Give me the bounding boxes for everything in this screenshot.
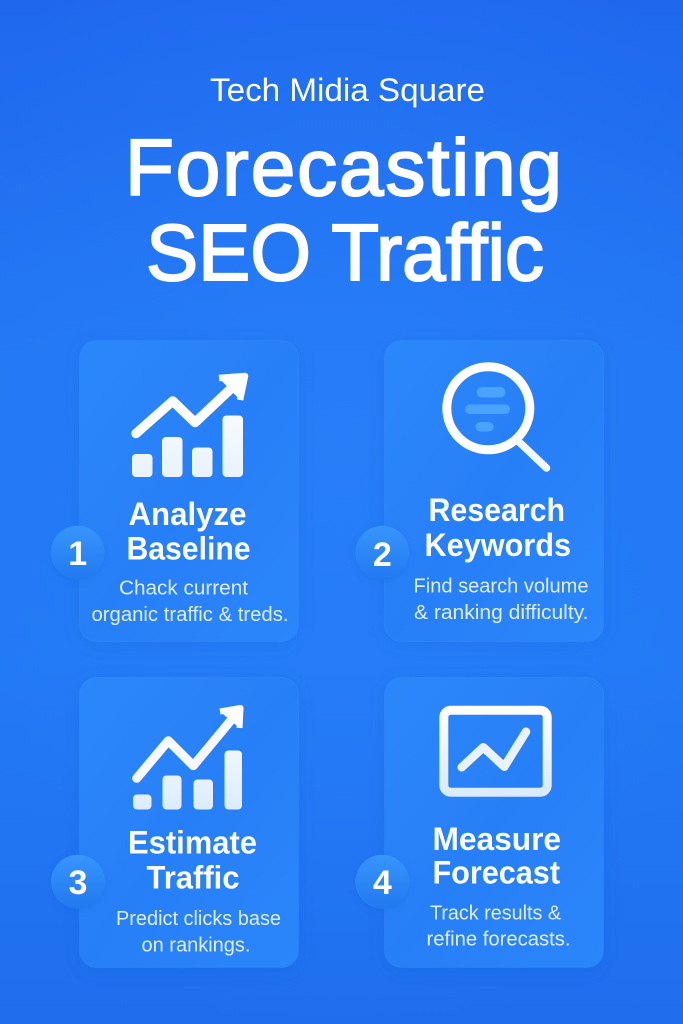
description: Track results &	[430, 902, 562, 924]
title: Forecasting	[125, 123, 562, 212]
heading: measure forecast: Measure	[432, 821, 561, 857]
description	[426, 902, 570, 950]
panel: step 3 estimate traffic	[51, 678, 298, 968]
icon: growth chart	[132, 376, 245, 477]
title	[125, 123, 562, 297]
heading: research keywords	[424, 492, 571, 563]
number badge 4: 4	[373, 864, 392, 902]
number badge 2: 2	[373, 536, 392, 574]
heading: estimate traffic	[128, 824, 257, 896]
heading: research keywords: Keywords	[424, 527, 571, 563]
description	[116, 908, 281, 956]
number badge 1: 1	[68, 535, 87, 573]
description	[414, 576, 588, 624]
title: SEO Traffic	[146, 208, 544, 297]
number badge 3: 3	[69, 864, 87, 902]
description: Predict clicks base	[116, 908, 281, 930]
heading: measure forecast: Forecast	[432, 854, 560, 890]
icon: chart monitor	[444, 710, 547, 792]
number badge 1	[51, 526, 105, 580]
heading: analyze baseline: Baseline	[126, 530, 250, 566]
description: Chack current	[119, 578, 248, 600]
heading: analyze baseline	[126, 496, 250, 566]
heading: estimate traffic: Traffic	[146, 860, 240, 896]
number badge 3	[51, 855, 105, 909]
description	[92, 578, 288, 626]
heading: analyze baseline: Analyze	[128, 496, 246, 532]
description: on rankings.	[142, 934, 250, 956]
description: refine forecasts.	[426, 928, 570, 950]
panel: step 2 research keywords	[355, 340, 604, 642]
number badge 4	[355, 855, 409, 909]
panel: step 4 measure forecast	[355, 678, 604, 968]
icon: magnifying glass	[447, 367, 546, 468]
description: organic traffic & treds.	[92, 604, 288, 626]
panel: step 1 analyze baseline	[51, 340, 298, 642]
description: & ranking difficulty.	[414, 602, 588, 624]
description: Find search volume	[414, 576, 588, 598]
brand name: Tech Midia Square	[210, 72, 485, 108]
icon: growth chart	[133, 708, 242, 810]
heading: measure forecast	[432, 821, 561, 890]
number badge 2	[355, 526, 409, 580]
heading: estimate traffic: Estimate	[128, 824, 257, 860]
heading: research keywords: Research	[428, 492, 565, 528]
